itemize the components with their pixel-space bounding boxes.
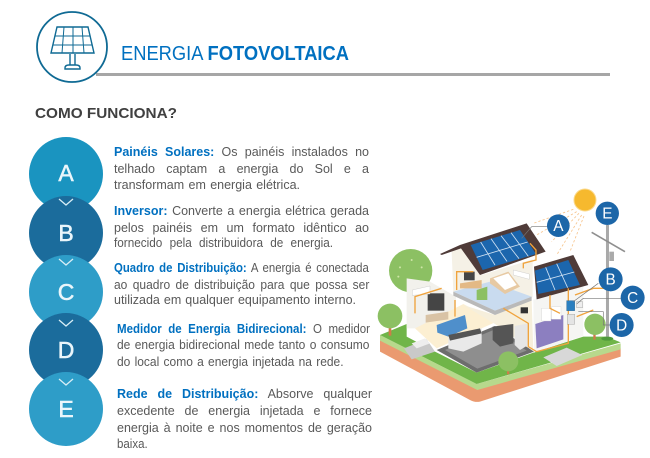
sun with rays <box>533 189 596 255</box>
step circles A to E: D <box>58 337 74 363</box>
text block: quadro de distribuição: Quadro de Distribuição: A energia é conectada <box>114 261 369 275</box>
step circles A to E: E <box>58 396 74 422</box>
text block: inversor: fornecido pela distribuidora de energia. <box>114 236 333 250</box>
callout E <box>596 202 619 225</box>
callout B: B <box>606 272 616 289</box>
subheading: COMO FUNCIONA? <box>35 105 177 122</box>
right room <box>533 285 583 353</box>
text block: rede de distribuição: Rede de Distribuição: Absorve qualquer <box>117 387 372 401</box>
upper floor <box>452 247 533 315</box>
text block: medidor de energia bidirecional: de energia bidirecional mede tanto o consumo <box>117 338 369 352</box>
text block: rede de distribuição <box>117 387 372 451</box>
text block: medidor de energia bidirecional <box>117 322 370 369</box>
header rule <box>96 73 610 76</box>
callout A: A <box>553 218 564 235</box>
callout B <box>599 267 623 291</box>
orange wiring <box>415 243 607 352</box>
illustration: solar house <box>378 189 645 402</box>
callout C <box>621 286 645 310</box>
text block: painéis solares: telhado captam a energia do Sol e a <box>114 162 369 176</box>
step circles A to E: C <box>58 279 74 305</box>
callout D: D <box>616 317 627 334</box>
callout C: C <box>627 290 638 307</box>
title: ENERGIA FOTOVOLTAICA <box>121 43 349 65</box>
main roof with panels <box>440 223 546 275</box>
callout E: E <box>602 206 612 223</box>
text block: rede de distribuição: excedente de energia injetada e fornece <box>117 404 372 418</box>
furniture <box>412 270 529 352</box>
text block: inversor: Inversor: Converte a energia elétrica gerada <box>114 204 369 218</box>
text block: inversor: pelos painéis em um formato idêntico ao <box>114 221 369 235</box>
living room walls and floors <box>404 278 534 373</box>
text block: medidor de energia bidirecional: do local como a energia injetada na rede. <box>117 355 344 369</box>
small roof with panels <box>534 255 588 299</box>
island soil and grass <box>380 324 621 402</box>
step circles A to E: A <box>58 160 74 186</box>
text block: medidor de energia bidirecional: Medidor de Energia Bidirecional: O medidor <box>117 322 370 336</box>
callout leader lines <box>522 227 622 325</box>
text block: quadro de distribuição: utilizada em qualquer equipamento interno. <box>114 293 356 307</box>
text block: painéis solares: Painéis Solares: Os painéis instalados no <box>114 145 369 159</box>
text block: painéis solares <box>114 145 369 192</box>
text block: rede de distribuição: baixa. <box>117 437 148 451</box>
text block: inversor <box>114 204 369 250</box>
tree: back left <box>389 249 432 292</box>
step circles A to E: B <box>58 220 74 246</box>
callout D <box>610 313 634 337</box>
text block: rede de distribuição: energia à noite e nos momentos de geração <box>117 421 372 435</box>
callout A <box>547 214 570 237</box>
utility pole <box>592 225 625 341</box>
trees <box>378 304 606 374</box>
text block: quadro de distribuição <box>114 261 370 307</box>
text block: quadro de distribuição: ao quadro de distribuição para que possa ser <box>114 278 369 292</box>
step circles A to E <box>29 137 103 446</box>
walkway <box>543 348 582 366</box>
text block: painéis solares: transformam em energia elétrica. <box>114 178 300 192</box>
meters and inverter <box>521 301 583 324</box>
icon: solar panel <box>37 12 107 82</box>
